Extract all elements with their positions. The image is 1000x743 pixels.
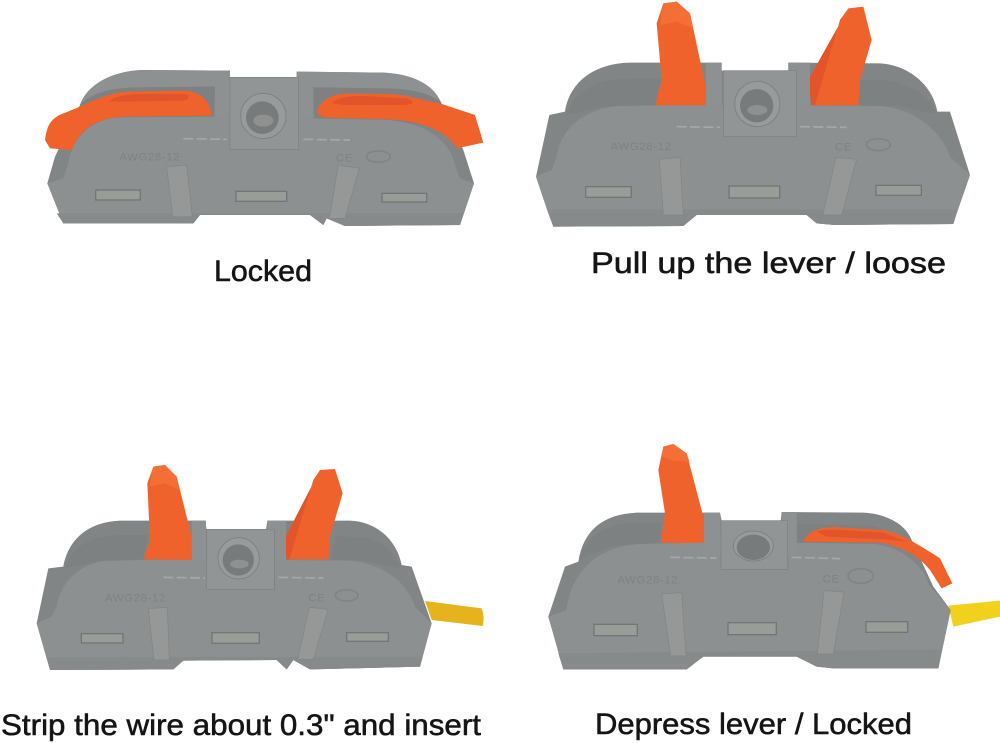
clips	[167, 165, 359, 218]
wire windows	[586, 185, 921, 198]
wire windows	[594, 622, 908, 636]
label: Locked: Locked	[214, 255, 312, 288]
clips	[148, 607, 328, 660]
clips	[659, 157, 857, 215]
embossed markings: CE	[336, 153, 353, 165]
embossed markings: CE	[308, 592, 325, 604]
center mounting block with hole	[230, 77, 299, 149]
embossed markings: AWG28-12	[105, 592, 166, 604]
wire windows	[81, 633, 388, 643]
lever: right closed	[317, 93, 483, 148]
lever: right raised	[808, 7, 872, 105]
lever: left raised	[655, 2, 706, 105]
yellow wire	[948, 601, 1000, 627]
lever: left raised	[658, 444, 704, 543]
panel: locked connector	[45, 70, 483, 226]
wire windows	[96, 190, 427, 202]
yellow wire	[425, 601, 484, 626]
clips	[662, 591, 844, 656]
embossed markings: CE	[835, 142, 852, 154]
label: Strip the wire: Strip the wire about 0.3" and insert	[1, 709, 481, 742]
embossed markings	[617, 569, 873, 586]
label: Depress lever / Locked: Depress lever / Locked	[595, 708, 912, 741]
center mounting block with hole	[207, 529, 274, 589]
label: Pull up the lever / loose: Pull up the lever / loose	[591, 247, 946, 280]
embossed markings: CE	[823, 574, 840, 586]
embossed markings: AWG28-12	[119, 152, 180, 164]
embossed markings	[119, 151, 390, 165]
panel: depressed lever connector	[548, 444, 1000, 669]
panel: lever pulled up connector	[536, 2, 970, 227]
lever: right closed	[803, 527, 952, 588]
lever: left closed	[45, 91, 212, 150]
embossed markings: AWG28-12	[617, 574, 678, 586]
embossed markings	[611, 139, 890, 154]
panel: wire inserted connector	[37, 465, 484, 670]
center mounting block with hole	[723, 71, 797, 137]
lever: right raised	[284, 469, 343, 559]
lever: left raised	[143, 465, 192, 560]
center mounting block with hole	[721, 521, 788, 569]
embossed markings	[105, 590, 358, 604]
embossed markings: AWG28-12	[611, 141, 672, 153]
